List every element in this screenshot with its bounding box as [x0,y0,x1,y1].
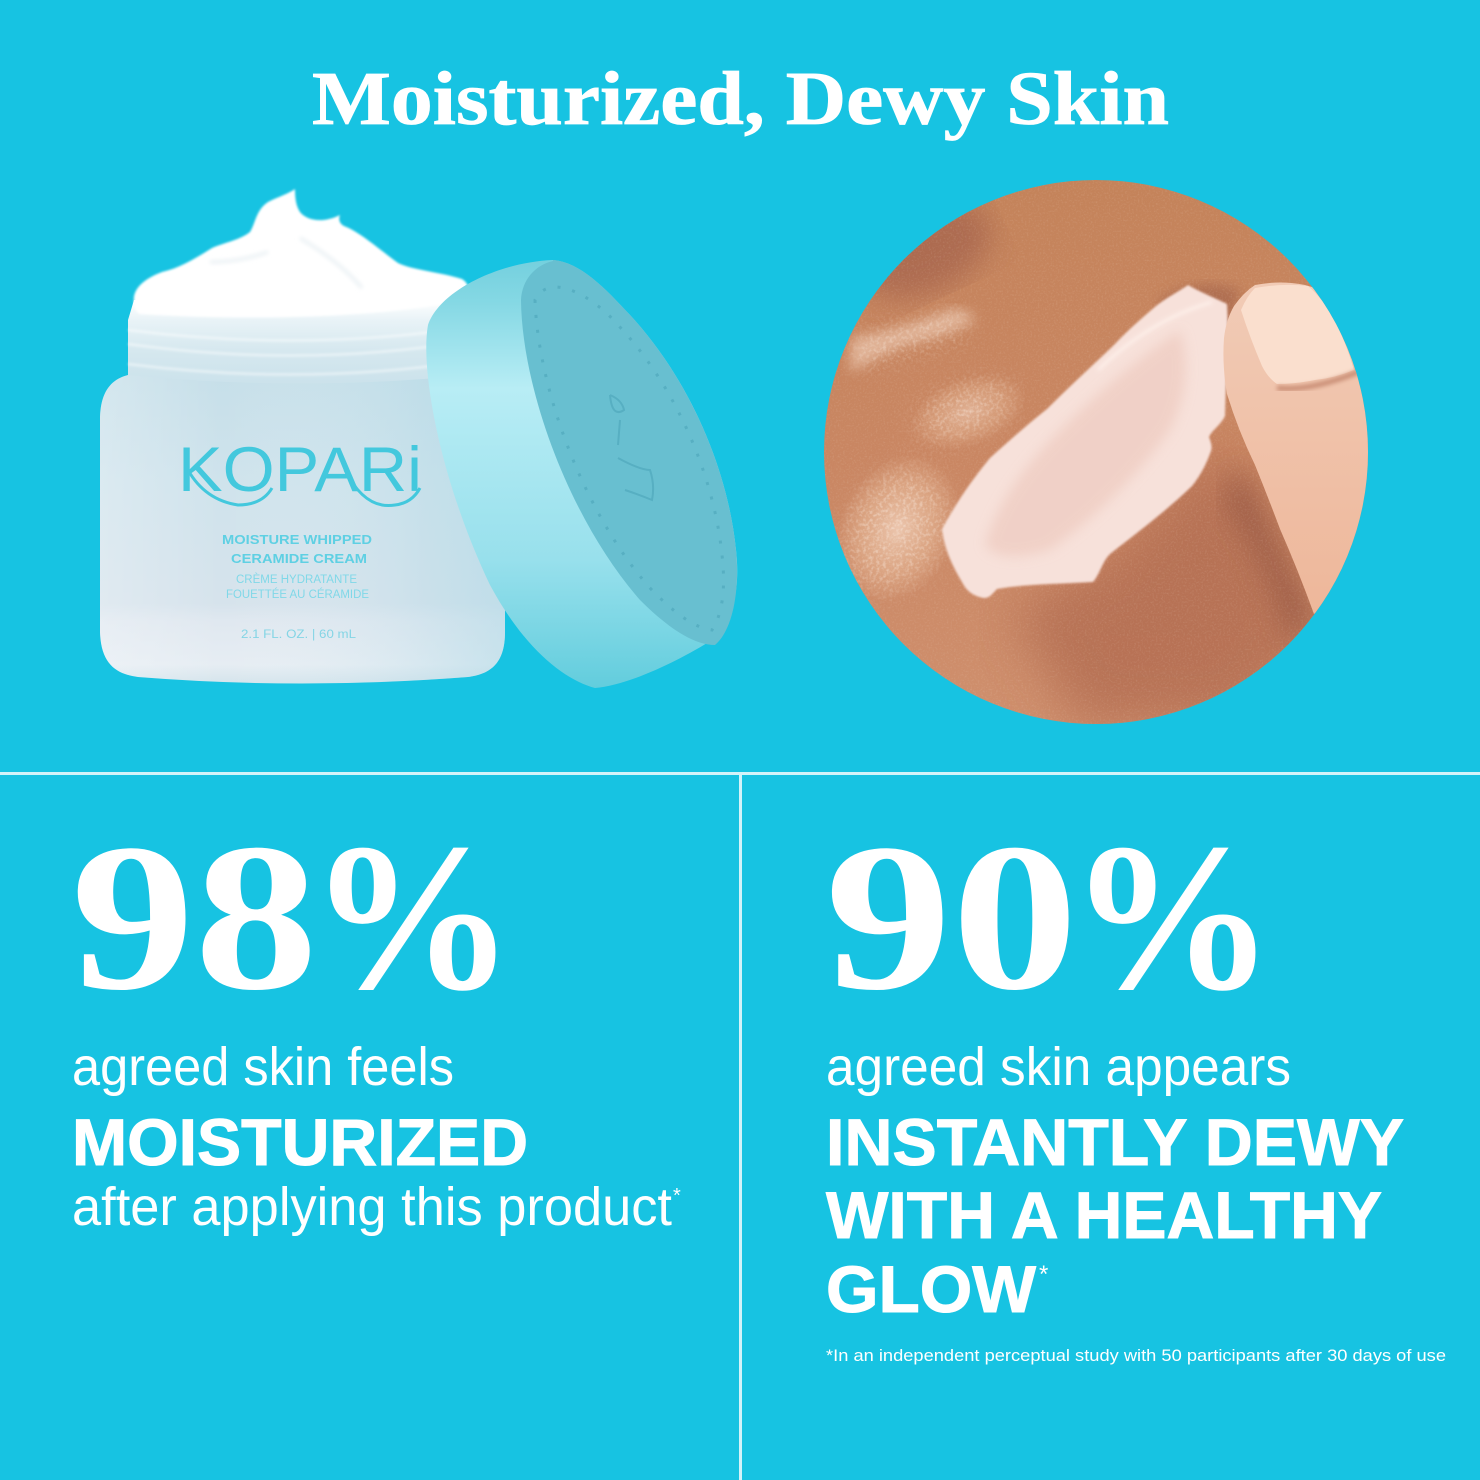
logo swoosh [188,470,420,506]
skin shine [835,304,1024,600]
jar label: CERAMIDE CREAM [231,551,367,566]
description: agreed skin feels [72,1037,454,1097]
skin grain [824,180,1312,724]
jar body [100,375,505,684]
cream [134,189,468,317]
description: GLOW [826,1252,1037,1326]
description: after applying this product [72,1177,672,1237]
brand name: KOPARi [178,435,422,505]
stat: 98% [71,800,515,1035]
description: * [673,1185,681,1207]
stat: 98%: 98 [71,800,318,1034]
stat panel: dewy [825,801,1446,1365]
product: cream jar [100,189,505,684]
description: INSTANTLY DEWY [826,1105,1404,1179]
lid side [426,260,737,688]
jar label: FOUETTÉE AU CÉRAMIDE [226,588,369,601]
skin [824,180,1368,724]
description: * [1039,1261,1048,1288]
description [72,1037,681,1237]
lid top face [521,260,737,645]
size: 2.1 FL. OZ. | 60 mL [241,629,357,641]
product: jar lid [426,260,737,688]
stat: 90%: % [1069,801,1275,1035]
photo: cream on skin [813,180,1380,724]
lid embossed mark [535,287,724,630]
product name: MOISTURE WHIPPED [222,532,372,547]
description: MOISTURIZED [72,1105,528,1179]
cream smear [942,285,1228,598]
stat: 90% [825,801,1275,1035]
description: agreed skin appears [826,1037,1291,1097]
description [826,1037,1404,1326]
finger [1223,282,1380,614]
description: WITH A HEALTHY [826,1178,1382,1252]
title: Moisturized, Dewy Skin [312,57,1169,141]
stat: 90%: 90 [825,801,1078,1034]
french name: CRÈME HYDRATANTE [236,573,357,586]
jar neck [128,300,468,400]
footnote: *In an independent perceptual study with 50 participants after 30 days of use [826,1346,1446,1365]
stat panel: moisturized [71,800,681,1237]
fingernail [1241,285,1354,384]
jar label [178,435,422,641]
stat: 98%: % [309,801,515,1035]
divider lines [0,772,1480,1480]
